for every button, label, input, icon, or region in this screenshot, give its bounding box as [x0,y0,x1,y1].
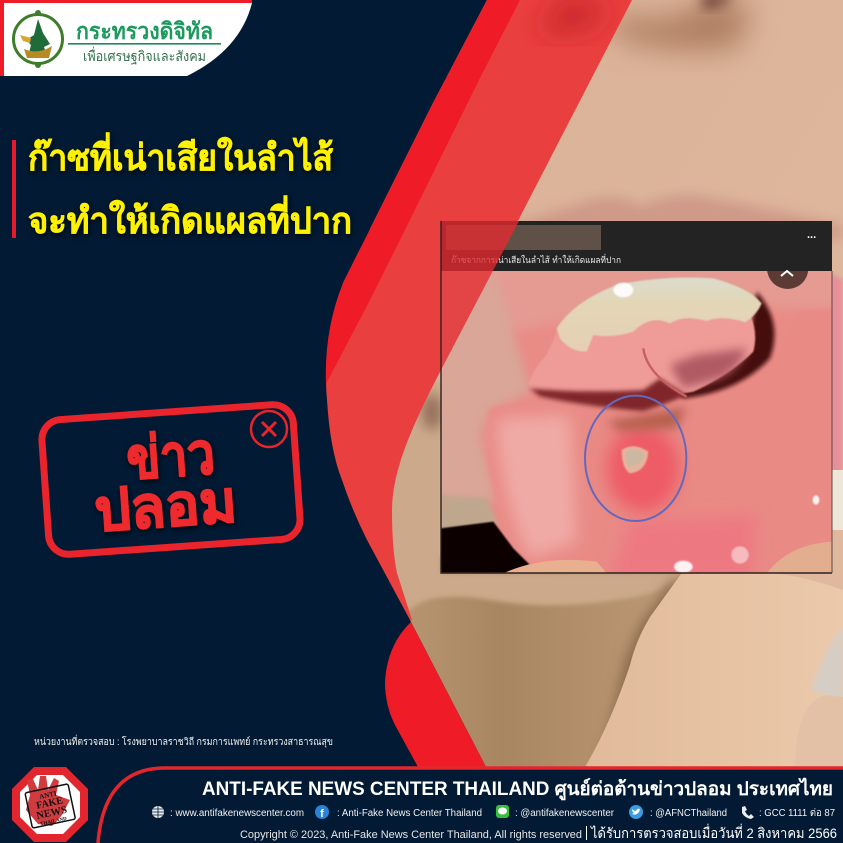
ministry tagline: เพื่อเศรษฐกิจและสังคม [83,47,206,65]
fake news stamp [41,403,301,556]
red tint over screenshot [441,221,519,370]
close icon [781,271,793,276]
black shadow [440,522,530,573]
red band nostril shade [540,0,610,31]
red stripes [0,0,252,76]
lower lip inside [489,310,831,488]
lower lip light area [497,415,577,558]
line account: : @antifakenewscenter [515,808,615,819]
finger shadow [603,575,678,732]
ministry emblem [14,10,62,68]
source credit: หน่วยงานที่ตรวจสอบ : โรงพยาบาลราชวิถี กรมการแพทย์ กระทรวงสาธารณสุข [34,734,333,748]
hotline: : GCC 1111 ต่อ 87 [759,808,835,819]
screenshot panel [430,221,843,582]
stamp text [93,421,239,544]
lower red shape [385,622,486,767]
dark close button [767,271,808,289]
title accent bar [12,140,16,238]
logo panel [0,0,252,76]
navy side shape [0,0,487,767]
grey gap between fingers [810,625,843,700]
stamp x icon [251,411,287,447]
teeth [557,277,762,352]
translucent red band [320,0,632,640]
title: จะทำให้เกิดแผลที่ปาก [28,195,352,241]
lower lip saturated area [614,515,756,572]
badge label: NEWS [35,805,68,822]
gum [529,318,756,394]
background photo: face and finger [370,0,843,767]
screenshot frame edge [441,221,832,573]
ministry name: กระทรวงดิจิทัล [76,18,213,44]
second finger [767,542,833,573]
icon: website [152,806,164,818]
icon: line [496,805,509,818]
second fingertip [822,695,843,766]
divider [586,826,587,840]
chin [408,557,700,766]
stamp text: ปลอม [93,469,239,544]
saliva highlights [613,283,819,573]
ulcer redness [607,425,680,512]
lower lip of chin [370,380,680,610]
thumb [503,560,607,573]
footer band [0,767,843,843]
footer red curve [98,768,843,843]
red hand [26,776,70,826]
ulcer [622,446,648,473]
icon: twitter [629,805,643,819]
solid red band [326,0,520,384]
gum frenulum [643,348,687,397]
icon: facebook [315,805,329,820]
stamp text: ข่าว [124,421,217,492]
website: : www.antifakenewscenter.com [170,808,304,819]
facebook page: : Anti-Fake News Center Thailand [337,808,482,819]
lips right of frame [832,272,843,470]
copyright: Copyright © 2023, Anti-Fake News Center Thailand, All rights reserved [240,829,582,841]
icon: facebook: f [320,808,324,820]
skin and black shadow at lower left [440,495,498,532]
title: ก๊าซที่เน่าเสียในลำไส้ [28,132,333,178]
post caption: ก๊าซจากการเน่าเสียในลำไส้ ทำให้เกิดแผลที่ปาก [451,253,621,265]
dark mouth interior [663,292,774,398]
badge label: FAKE [35,795,64,812]
badge label: THAILAND [40,817,68,827]
blue circle [585,396,686,521]
upper lip [510,195,843,240]
more menu: ... [807,229,816,241]
nostril [700,0,735,10]
title [28,132,352,241]
mouth photo [430,262,843,502]
gum right shade [670,348,747,388]
finger [585,573,843,767]
screenshot header [441,221,832,271]
white highlight right of frame [832,470,843,530]
mouth corner shadow [422,394,442,430]
icon: phone [742,806,754,819]
blurred account name [446,225,601,250]
footer heading: ANTI-FAKE NEWS CENTER THAILAND ศูนย์ต่อต้านข่าวปลอม ประเทศไทย [202,777,833,801]
nose shadow [610,0,748,51]
logo underline [68,43,221,45]
badge label: ANTI [39,789,58,801]
lip crease [530,378,687,412]
twitter account: : @AFNCThailand [650,808,727,819]
upper crease shade [607,407,687,432]
badge label [25,784,76,829]
anti-fake news badge [12,767,88,842]
